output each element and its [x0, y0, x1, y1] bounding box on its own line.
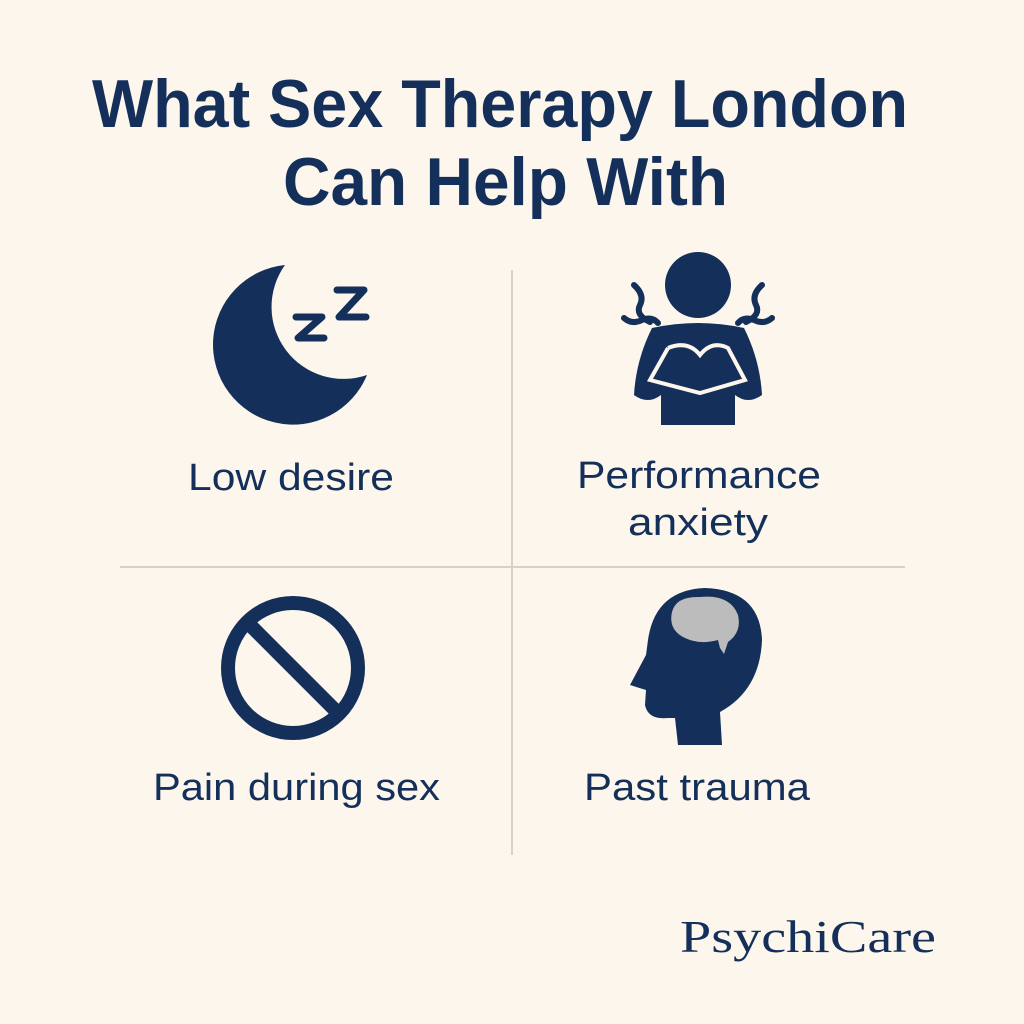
title: What Sex Therapy London	[92, 66, 908, 142]
label: low desire: Low desire	[188, 457, 394, 499]
panel: low desire	[188, 265, 394, 499]
icon: anxious person	[624, 252, 772, 425]
label: performance anxiety: Performance	[577, 455, 821, 497]
panel: past trauma	[584, 588, 811, 809]
title	[92, 66, 908, 220]
icon: head with brain	[630, 588, 762, 745]
icon: moon with zzz	[213, 265, 367, 425]
panel: performance anxiety: anxiety	[628, 502, 768, 544]
logo: PsychiCare: PsychiCare	[680, 911, 936, 962]
icon: prohibition sign	[228, 603, 358, 733]
label: pain during sex: Pain during sex	[153, 767, 440, 809]
panel: pain during sex	[153, 603, 440, 809]
panel: performance anxiety	[577, 252, 821, 544]
label: past trauma: Past trauma	[584, 767, 811, 809]
title: Can Help With	[283, 144, 728, 220]
